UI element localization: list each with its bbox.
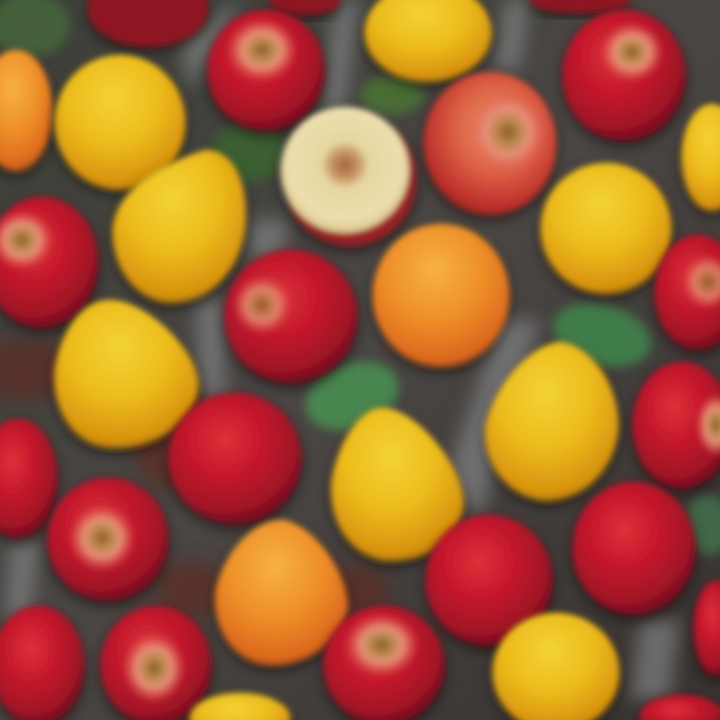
fruit: orange lower centre (215, 520, 347, 664)
fruit: red lower right (573, 482, 695, 614)
background: reddish shadows between fruit (0, 340, 390, 620)
fruit: yellow top centre (365, 0, 491, 81)
fruit: red bottom right (640, 695, 720, 720)
leaves (0, 0, 720, 555)
fruit: red top far right (530, 0, 630, 12)
fruit: yellow far right (682, 104, 720, 210)
fruit: yellow upper left (55, 55, 185, 189)
fruit: dark red top (88, 0, 208, 46)
fruit: dark red top centre (270, 0, 340, 14)
fruit: yellow bottom (190, 693, 290, 720)
fruit: red with core, bottom centre (324, 606, 444, 720)
fruit: red-orange with core (424, 72, 556, 214)
fruit: yellow pear right (486, 342, 618, 500)
leaf: far right (684, 495, 720, 555)
fruit: red left (0, 197, 98, 327)
leaf: top left (0, 0, 70, 57)
fruit: red bottom left (0, 606, 84, 720)
fruit: yellow pear centre (332, 408, 463, 560)
fruit: yellow bottom right (493, 613, 619, 720)
fruit: red with core, top right (563, 10, 685, 140)
fruit: red with core, bottom (101, 606, 211, 720)
fruit: cut cream fruit (281, 107, 416, 245)
fruit: yellow pear left (55, 300, 198, 447)
leaf: centre (296, 350, 408, 442)
fruit: red far right edge (694, 581, 720, 675)
fruit: red lower centre left (169, 393, 301, 523)
fruit: red centre (225, 250, 357, 382)
fruit: yellow right (541, 163, 671, 293)
fruit: red lower centre right (426, 515, 552, 645)
fruit: orange centre (373, 224, 509, 366)
fruit: red far right (655, 235, 720, 349)
leaf: top centre (360, 75, 424, 115)
leaf: right (546, 293, 658, 377)
fruit: red far left (0, 419, 57, 537)
fruit: red right (633, 362, 720, 488)
fruit: orange far left (0, 50, 52, 170)
fruit: red with core, lower left (48, 478, 168, 600)
leaf: upper centre (212, 122, 284, 182)
fruit: red with core, top (208, 10, 324, 130)
fruit: yellow upper centre left (113, 150, 245, 302)
